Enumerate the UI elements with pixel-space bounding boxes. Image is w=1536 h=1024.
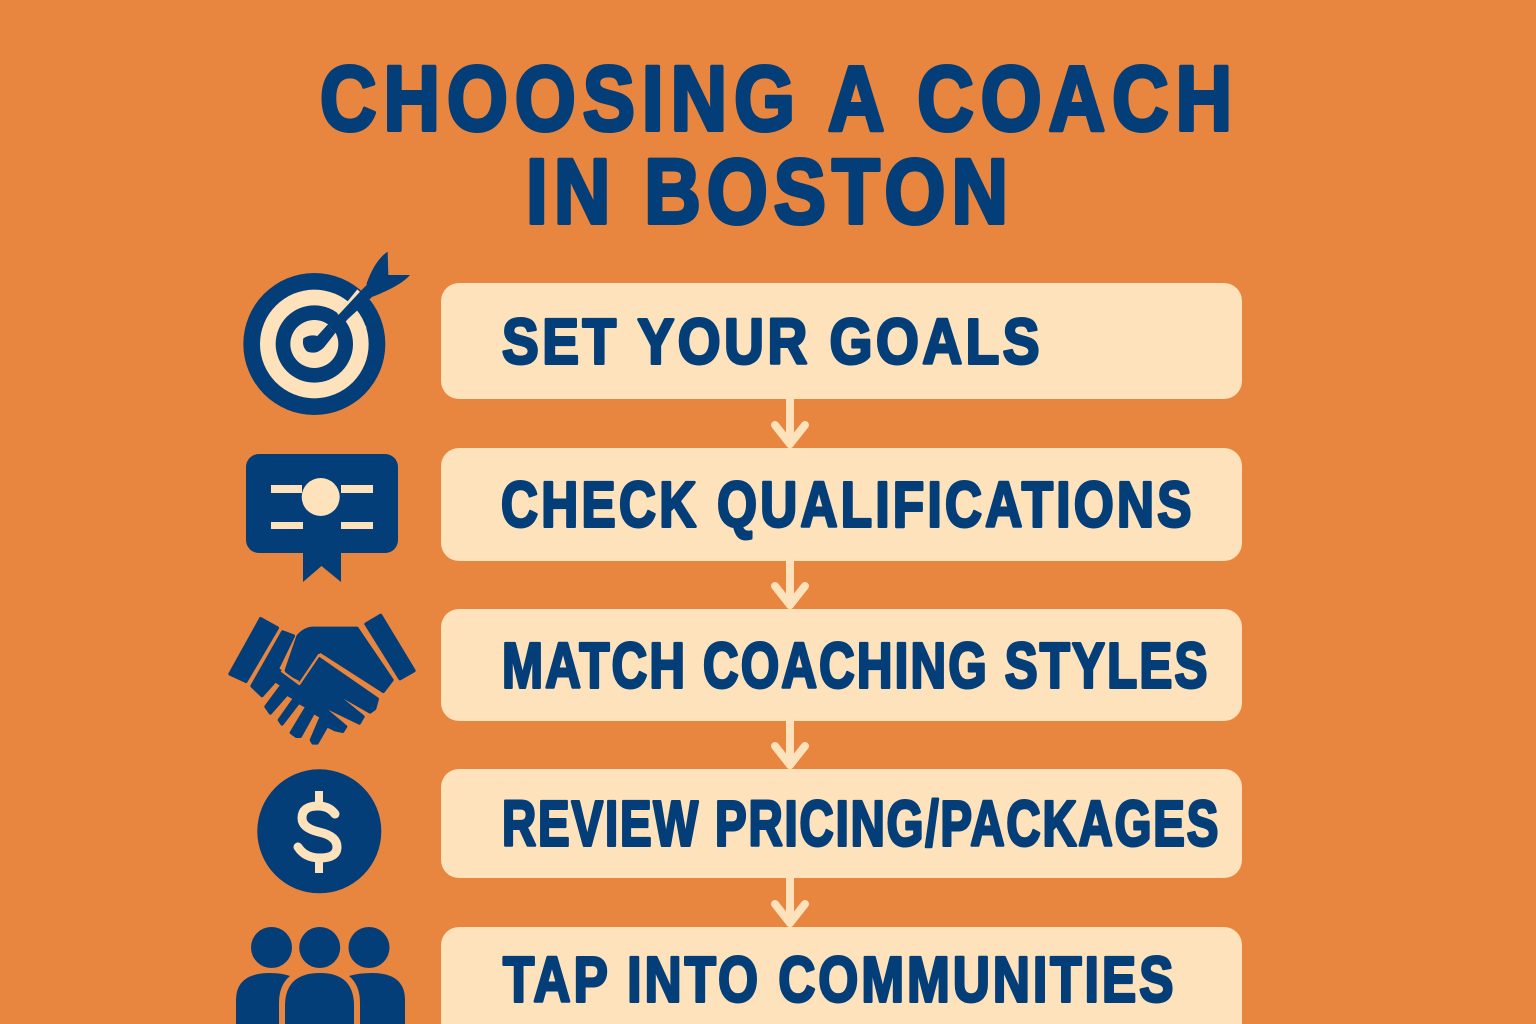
arrow: step 1 to 2 bbox=[775, 399, 805, 444]
panel: match coaching styles: MATCH COACHING STYLES bbox=[502, 630, 1207, 702]
arrow: step 4 to 5 bbox=[775, 878, 805, 923]
panel: review pricing/packages bbox=[441, 769, 1242, 878]
icon: group of people bbox=[236, 927, 405, 1024]
panel: check qualifications: CHECK QUALIFICATIONS bbox=[501, 470, 1191, 541]
panel: set your goals bbox=[441, 283, 1242, 399]
title bbox=[320, 48, 1232, 243]
panel: check qualifications bbox=[441, 448, 1242, 561]
icon: target with arrow bbox=[243, 252, 410, 415]
title: CHOOSING A COACH bbox=[320, 48, 1232, 150]
panel: tap into communities bbox=[441, 927, 1242, 1024]
panel: match coaching styles bbox=[441, 609, 1242, 721]
panel: tap into communities: TAP INTO COMMUNITIES bbox=[503, 945, 1173, 1016]
panel: review pricing/packages: REVIEW PRICING/PACKAGES bbox=[502, 788, 1218, 859]
title: IN BOSTON bbox=[526, 141, 1008, 243]
icon: handshake bbox=[230, 615, 414, 743]
arrow: step 2 to 3 bbox=[775, 561, 805, 605]
arrow: step 3 to 4 bbox=[775, 721, 805, 765]
gap between clasped hands bbox=[281, 655, 383, 696]
icon: dollar coin bbox=[257, 769, 381, 893]
panel: set your goals: SET YOUR GOALS bbox=[502, 306, 1040, 377]
icon: certificate bbox=[246, 454, 398, 582]
